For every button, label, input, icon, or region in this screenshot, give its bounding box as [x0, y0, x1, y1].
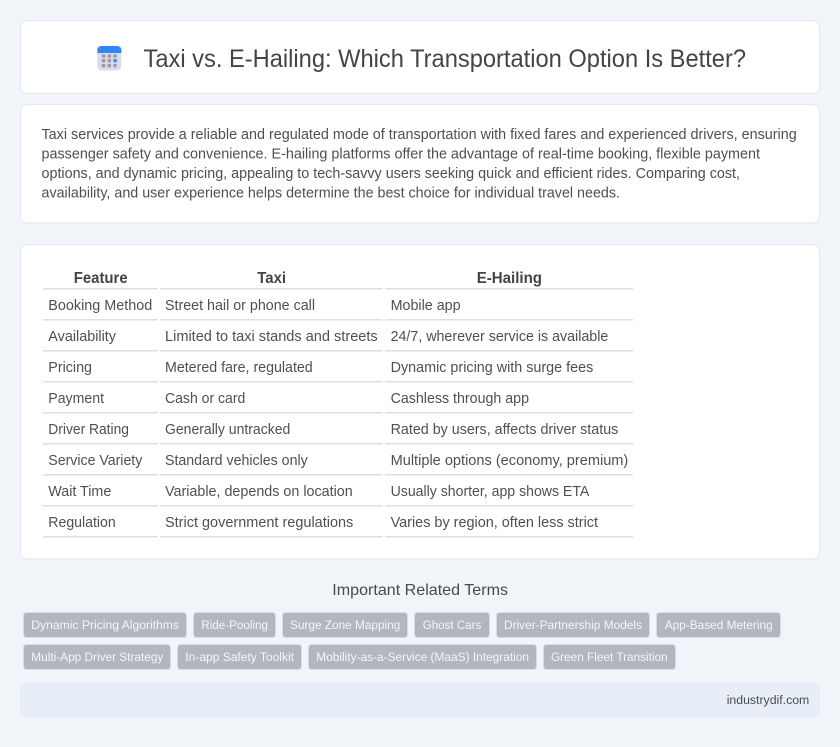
- tag: surge zone mapping: [282, 612, 408, 638]
- table row: driver rating: Rated by users, affects driver status: [391, 422, 618, 438]
- tag: driver-partnership models: Driver-Partnership Models: [504, 618, 642, 632]
- table row: service variety: Multiple options (economy, premium): [391, 453, 628, 469]
- tag: green fleet transition: Green Fleet Transition: [551, 650, 668, 664]
- table row: booking method: [48, 298, 461, 314]
- tag: driver-partnership models: [496, 612, 650, 638]
- table row: availability: 24/7, wherever service is available: [391, 329, 608, 345]
- table row: pricing: Metered fare, regulated: [165, 360, 313, 376]
- text block: description: availability, and user experience helps determine the best choice for individual travel needs.: [42, 186, 620, 202]
- tag: ride-pooling: [194, 612, 276, 638]
- tag: ghost cars: Ghost Cars: [423, 618, 481, 632]
- title: Taxi vs. E-Hailing: Which Transportation Option Is Better?: [144, 45, 746, 73]
- table row: availability: [48, 329, 608, 345]
- tag: green fleet transition: [544, 644, 676, 670]
- table row: driver rating: [48, 422, 618, 438]
- tag: maas integration: [308, 644, 536, 670]
- table row: driver rating: Generally untracked: [165, 422, 290, 438]
- table row: pricing: [48, 360, 593, 376]
- tag: app-based metering: App-Based Metering: [665, 618, 773, 632]
- table row: regulation: [48, 515, 598, 531]
- table row: payment: [48, 391, 529, 407]
- table row: wait time: [48, 484, 590, 500]
- table row: availability: Limited to taxi stands and streets: [165, 329, 378, 345]
- tag: multi-app driver strategy: Multi-App Driver Strategy: [31, 650, 164, 664]
- table row: service variety: Service Variety: [48, 453, 143, 469]
- heading: related terms: Important Related Terms: [332, 582, 508, 599]
- tag: multi-app driver strategy: [24, 644, 170, 670]
- table row: pricing: Pricing: [48, 360, 92, 376]
- table row: regulation: Regulation: [48, 515, 116, 531]
- tag: ghost cars: [414, 612, 490, 638]
- table row: pricing: Dynamic pricing with surge fees: [391, 360, 593, 376]
- text block: description: Taxi services provide a reliable and regulated mode of transportation with fixed fares and experienced drivers, ensuring: [42, 127, 797, 143]
- panel: comparison table: [20, 244, 820, 559]
- footer bar: [20, 683, 820, 717]
- table row: regulation: Varies by region, often less strict: [391, 515, 598, 531]
- text block: description: passenger safety and convenience. E-hailing platforms offer the advantage of real-time booking, flexible payment: [42, 147, 760, 163]
- text block: description: options, and dynamic pricing, appealing to tech-savvy users seeking quick and efficient rides. Comparing cost,: [42, 166, 740, 182]
- table row: regulation: Strict government regulations: [165, 515, 353, 531]
- table row: service variety: [48, 453, 628, 469]
- table row: driver rating: Driver Rating: [48, 422, 129, 438]
- tag: surge zone mapping: Surge Zone Mapping: [290, 618, 400, 632]
- footer source text: industrydif.com: [727, 693, 809, 707]
- icon: calendar: [97, 46, 121, 70]
- table row: payment: Payment: [48, 391, 104, 407]
- panel: introduction: [20, 104, 820, 223]
- tag: maas integration: Mobility-as-a-Service (MaaS) Integration: [316, 650, 529, 664]
- table row: booking method: Booking Method: [48, 298, 152, 314]
- tag: dynamic pricing algorithms: Dynamic Pricing Algorithms: [31, 618, 179, 632]
- header panel: [20, 20, 820, 94]
- tag: in-app safety toolkit: [178, 644, 302, 670]
- tag: in-app safety toolkit: In-app Safety Toolkit: [185, 650, 295, 664]
- tag: dynamic pricing algorithms: [24, 612, 186, 638]
- table header row: Feature: [74, 270, 128, 287]
- related term tags: [24, 612, 780, 670]
- table row: availability: Availability: [48, 329, 117, 345]
- table row: payment: Cashless through app: [391, 391, 529, 407]
- table row: wait time: Wait Time: [48, 484, 111, 500]
- table header row: [74, 270, 542, 287]
- table row: service variety: Standard vehicles only: [165, 453, 308, 469]
- tag: app-based metering: [656, 612, 780, 638]
- table row: wait time: Variable, depends on location: [165, 484, 353, 500]
- tag: ride-pooling: Ride-Pooling: [201, 618, 268, 632]
- table row: booking method: Street hail or phone call: [165, 298, 315, 314]
- text block: description: [42, 127, 797, 202]
- table row: booking method: Mobile app: [391, 298, 461, 314]
- table row: wait time: Usually shorter, app shows ETA: [391, 484, 590, 500]
- table header row: E-Hailing: [477, 270, 542, 287]
- table row: payment: Cash or card: [165, 391, 245, 407]
- table header row: Taxi: [257, 270, 286, 287]
